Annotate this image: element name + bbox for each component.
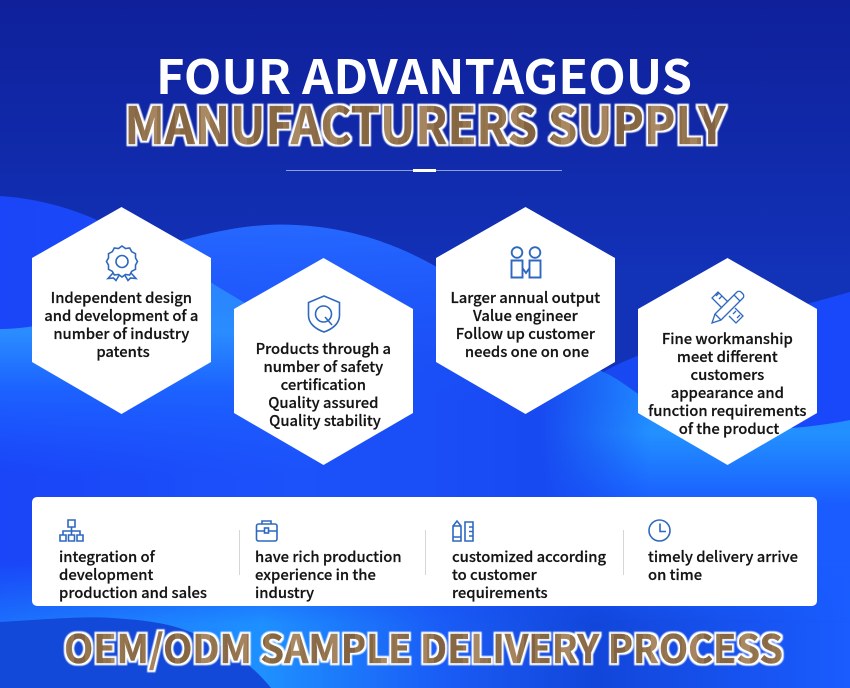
text: annual output: needs one on one: [465, 341, 589, 362]
text: annual output: Larger annual output: [451, 287, 600, 308]
text: customized: customized according: [452, 546, 606, 567]
text: customized: requirements: [452, 582, 548, 603]
text: annual output: Value engineer: [472, 305, 579, 326]
text: annual output: Follow up customer: [456, 323, 596, 344]
text: experience: have rich production: [255, 546, 402, 567]
capability: experience: [255, 521, 405, 603]
heading: oem odm sample delivery process: OEM/ODM SAMPLE DELIVERY PROCESS: [64, 619, 783, 675]
panel: capabilities strip: [32, 497, 817, 606]
panel: fine workmanship: [638, 258, 817, 465]
text: fine workmanship: of the product: [679, 418, 779, 439]
text: customized: to customer: [452, 564, 538, 585]
icon: shield with Q: [308, 296, 340, 332]
icon: briefcase: [256, 521, 277, 541]
capability: integration: [59, 520, 207, 603]
title divider: [286, 169, 562, 172]
text: safety certification: Quality stability: [269, 410, 381, 431]
icon: crossed pencil and ruler: [712, 291, 744, 323]
text: fine workmanship: function requirements: [648, 400, 807, 421]
panel: safety certification: [234, 258, 413, 465]
text: fine workmanship: meet different: [677, 346, 778, 367]
icon: pencil and ruler: [453, 521, 473, 541]
text: safety certification: certification: [281, 374, 366, 395]
text: integration: integration of: [59, 546, 156, 567]
text: independent design: patents: [96, 341, 150, 362]
text: integration: development: [59, 564, 153, 585]
icon: clock: [649, 520, 670, 541]
icon: two people: [512, 247, 540, 278]
heading: manufacturers supply: MANUFACTURERS SUPPLY: [124, 85, 726, 159]
heading: four advantageous: FOUR ADVANTAGEOUS: [156, 39, 692, 108]
text: timely delivery: timely delivery arrive: [648, 546, 798, 567]
text: independent design: and development of a: [44, 305, 198, 326]
text: fine workmanship: customers: [690, 364, 764, 385]
text: safety certification: Products through a: [256, 338, 391, 359]
icon: award rosette: [106, 246, 138, 280]
text: independent design: Independent design: [51, 287, 192, 308]
text: fine workmanship: Fine workmanship: [662, 328, 793, 349]
text: safety certification: number of safety: [264, 356, 383, 377]
capability: customized: [452, 521, 609, 603]
capability: timely delivery: [648, 520, 801, 585]
text: timely delivery: on time: [648, 564, 702, 585]
text: experience: industry: [255, 582, 314, 603]
text: independent design: number of industry: [53, 323, 189, 344]
text: safety certification: Quality assured: [268, 392, 378, 413]
text: experience: experience in the: [255, 564, 376, 585]
panel: annual output: [436, 207, 615, 414]
panel: independent design: [32, 207, 211, 414]
icon: org chart: [60, 520, 83, 541]
text: integration: production and sales: [59, 582, 207, 603]
text: fine workmanship: appearance and: [671, 382, 784, 403]
